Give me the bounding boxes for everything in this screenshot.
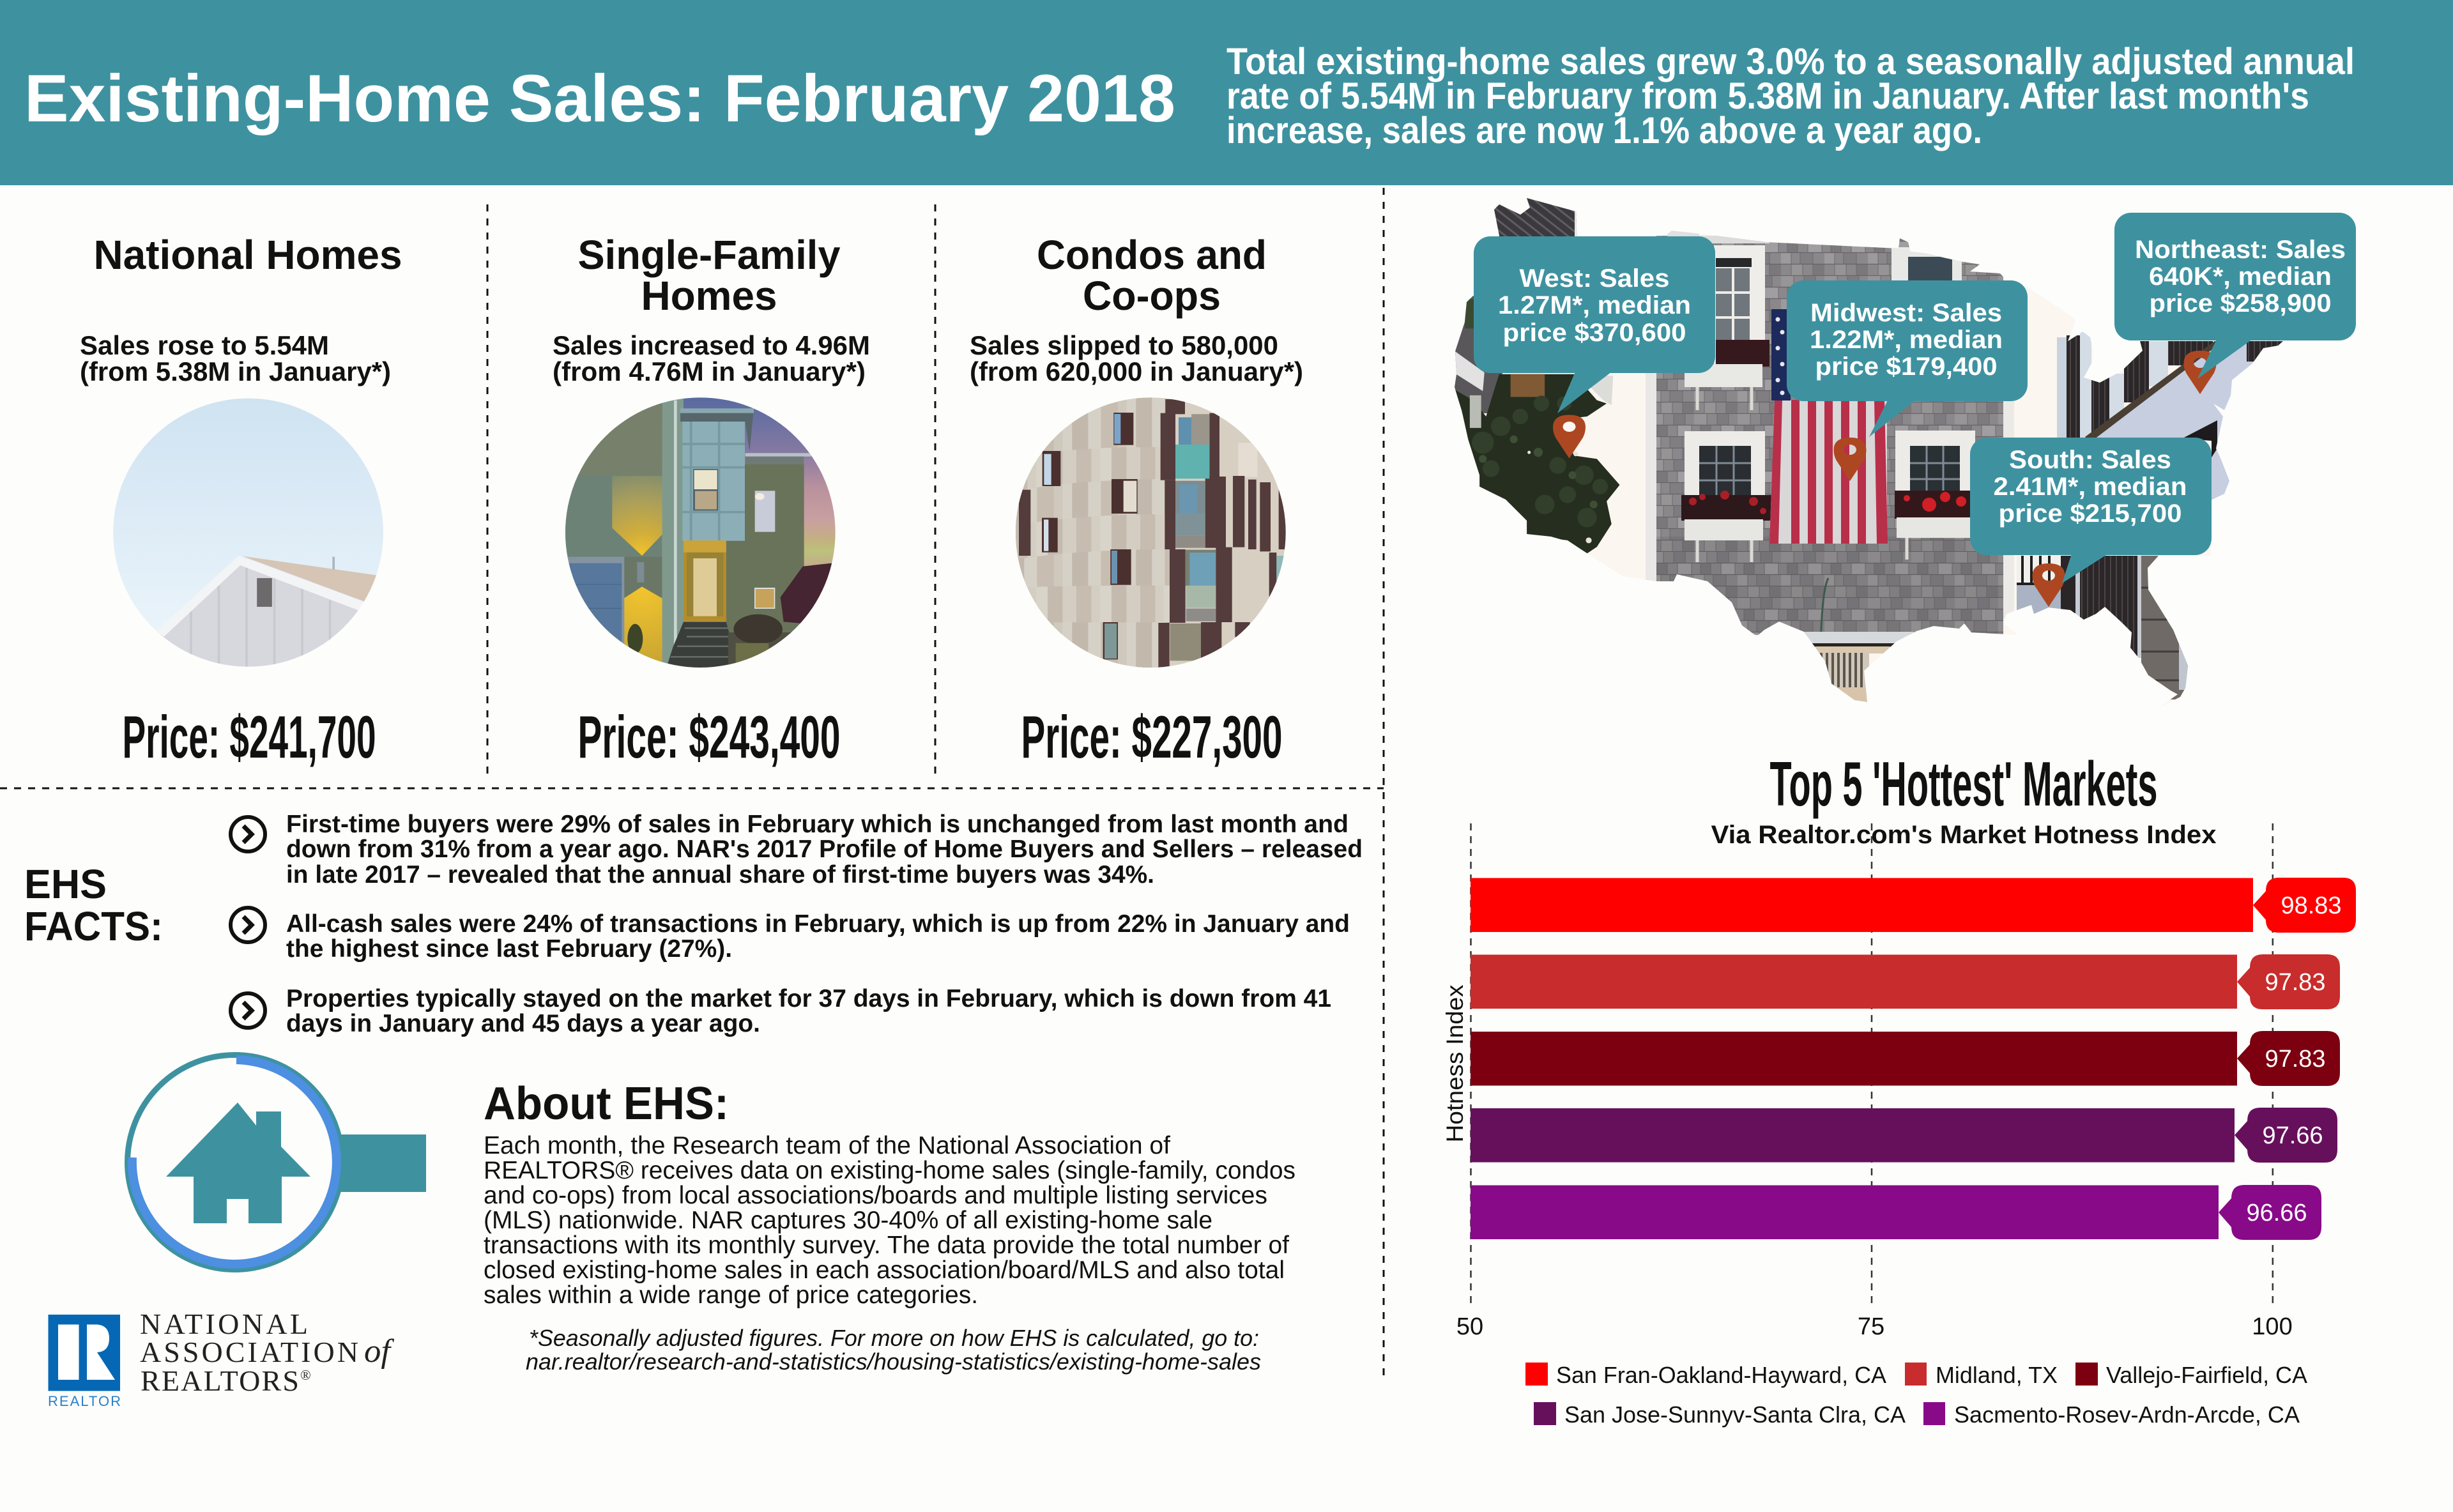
chart title: Top 5 'Hottest' Markets — [1769, 749, 2158, 819]
about paragraph: transactions with its monthly survey. The data provide the total number of — [484, 1232, 1289, 1259]
photo map of the US — [1450, 192, 2293, 715]
header summary: increase, sales are now 1.1% above a year ago. — [1226, 110, 1982, 151]
heading: national homes: National Homes — [93, 232, 402, 278]
logo: national association of realtors: ASSOCIATION — [140, 1336, 358, 1368]
national sales text: (from 5.38M in January*) — [80, 356, 391, 386]
bar: San Jose — [1471, 1108, 2337, 1163]
legend — [1525, 1362, 2307, 1428]
logo: national association of realtors: NATIONAL — [140, 1308, 308, 1340]
y axis label: Hotness Index — [1442, 984, 1468, 1142]
callout: west: West: Sales — [1519, 264, 1670, 293]
national sales text — [80, 330, 391, 386]
header banner — [0, 0, 2453, 185]
about paragraph: REALTORS® receives data on existing-home sales (single-family, condos — [484, 1157, 1295, 1184]
legend: Midland, TX — [1936, 1362, 2058, 1388]
callout: west: price $370,600 — [1502, 319, 1686, 347]
x axis labels: 50 — [1456, 1313, 1483, 1340]
condo sales text: Sales slipped to 580,000 — [970, 330, 1278, 360]
panel: national homes — [80, 232, 402, 770]
panel: condos and co-ops — [970, 232, 1303, 770]
chart subtitle: Via Realtor.com's Market Hotness Index — [1711, 821, 2217, 849]
bar: San Fran — [1471, 878, 2356, 933]
panel: single-family homes — [553, 232, 870, 770]
pin: northeast — [2183, 351, 2217, 394]
heading: condos and co-ops: Condos and — [1037, 232, 1267, 278]
callout: midwest: Midwest: Sales — [1810, 299, 2002, 327]
photo: townhouse at dusk — [562, 396, 839, 673]
title: Existing-Home Sales: February 2018 — [24, 61, 1175, 136]
callout: south — [1970, 438, 2212, 583]
callout: midwest: 1.22M*, median — [1810, 326, 2003, 354]
bar: Midland — [1471, 954, 2340, 1009]
logo: national association of realtors: of — [364, 1333, 395, 1370]
fact 1: down from 31% from a year ago. NAR's 2017 Profile of Home Buyers and Sellers – released — [286, 836, 1363, 863]
legend: San Fran-Oakland-Hayward, CA — [1556, 1362, 1886, 1388]
bar: San Jose: 97.66 — [2262, 1122, 2323, 1149]
condo sales text: (from 620,000 in January*) — [970, 356, 1303, 386]
fact 2: the highest since last February (27%). — [286, 935, 732, 963]
panel: EHS facts — [24, 811, 1363, 1037]
callout: midwest — [1787, 280, 2028, 437]
heading: single-family homes: Single-Family — [577, 232, 841, 278]
about paragraph: Each month, the Research team of the National Association of — [484, 1132, 1170, 1159]
footnote: nar.realtor/research-and-statistics/housing-statistics/existing-home-sales — [526, 1348, 1261, 1375]
price: national: Price: $241,700 — [123, 703, 376, 770]
condo sales text — [970, 330, 1303, 386]
heading: about EHS: About EHS: — [484, 1078, 729, 1129]
pin: west — [1553, 415, 1586, 459]
callout: south: South: Sales — [2009, 446, 2171, 474]
price: condos: Price: $227,300 — [1021, 703, 1283, 770]
callout: midwest: price $179,400 — [1815, 353, 1997, 381]
x axis labels — [1456, 1313, 2293, 1340]
callout: west — [1474, 236, 1715, 413]
callout: south: 2.41M*, median — [1993, 473, 2187, 501]
heading: condos and co-ops: Co-ops — [1083, 273, 1221, 319]
callout: northeast: Northeast: Sales — [2135, 236, 2346, 264]
callout: west: 1.27M*, median — [1498, 291, 1691, 319]
bar: Vallejo: 97.83 — [2265, 1046, 2326, 1073]
callout: south: price $215,700 — [1998, 500, 2182, 528]
header summary: rate of 5.54M in February from 5.38M in January. After last month's — [1226, 75, 2309, 117]
callout: northeast — [2114, 213, 2356, 379]
legend: San Jose-Sunnyv-Santa Clra, CA — [1564, 1401, 1906, 1428]
about paragraph: and co-ops) from local associations/boards and multiple listing services — [484, 1182, 1267, 1209]
heading: single-family homes: Homes — [641, 273, 777, 319]
heading: EHS facts: EHS — [24, 861, 107, 907]
fact 3: days in January and 45 days a year ago. — [286, 1010, 760, 1037]
about paragraph — [484, 1132, 1295, 1309]
x axis labels: 100 — [2252, 1313, 2293, 1340]
heading: EHS facts — [24, 861, 163, 949]
bar: Sacramento — [1471, 1185, 2321, 1240]
icon: chevron bullet 2 — [231, 908, 265, 942]
x axis labels: 75 — [1858, 1313, 1884, 1340]
heading: condos and co-ops — [1037, 232, 1267, 319]
price: single-family: Price: $243,400 — [577, 703, 841, 770]
logo: national association of realtors — [48, 1308, 395, 1409]
photo: house roof against sky — [112, 398, 390, 669]
fact 1: First-time buyers were 29% of sales in February which is unchanged from last month and — [286, 811, 1349, 838]
fact 2 — [231, 908, 1350, 963]
icon: chevron bullet 1 — [231, 817, 265, 851]
bar: Midland: 97.83 — [2265, 969, 2326, 996]
pin: midwest — [1833, 438, 1867, 481]
callout: northeast: 640K*, median — [2149, 263, 2332, 291]
panel: regional map — [1450, 192, 2356, 715]
photo: apartment facade — [1013, 396, 1289, 673]
single-family sales text: Sales increased to 4.96M — [553, 330, 870, 360]
bar: San Fran: 98.83 — [2281, 892, 2342, 919]
fact 1: in late 2017 – revealed that the annual share of first-time buyers was 34%. — [286, 861, 1154, 889]
heading: single-family homes — [577, 232, 841, 319]
about paragraph: sales within a wide range of price categories. — [484, 1281, 978, 1309]
panel: about EHS — [484, 1078, 1295, 1309]
fact 1 — [231, 811, 1363, 889]
footnote — [526, 1325, 1261, 1375]
chart: top 5 hottest markets — [1442, 749, 2356, 1428]
fact 3: Properties typically stayed on the market for 37 days in February, which is down from 41 — [286, 985, 1331, 1012]
icon: chevron bullet 3 — [231, 993, 265, 1028]
about paragraph: closed existing-home sales in each association/board/MLS and also total — [484, 1256, 1285, 1284]
icon: house badge — [128, 1055, 426, 1270]
single-family sales text — [553, 330, 870, 386]
callout: northeast: price $258,900 — [2149, 289, 2332, 317]
legend: Vallejo-Fairfield, CA — [2106, 1362, 2307, 1388]
national sales text: Sales rose to 5.54M — [80, 330, 329, 360]
bar: Sacramento: 96.66 — [2246, 1200, 2307, 1226]
heading: EHS facts: FACTS: — [24, 903, 163, 949]
fact 3 — [231, 985, 1331, 1037]
logo: national association of realtors: REALTOR — [48, 1393, 121, 1409]
single-family sales text: (from 4.76M in January*) — [553, 356, 866, 386]
header summary: Total existing-home sales grew 3.0% to a seasonally adjusted annual — [1226, 41, 2355, 82]
footnote: *Seasonally adjusted figures. For more on how EHS is calculated, go to: — [529, 1325, 1259, 1351]
legend: Sacmento-Rosev-Ardn-Arcde, CA — [1954, 1401, 2300, 1428]
pin: south — [2033, 563, 2065, 607]
logo: national association of realtors: ® — [300, 1367, 311, 1383]
header summary — [1226, 41, 2355, 151]
about paragraph: (MLS) nationwide. NAR captures 30-40% of all existing-home sale — [484, 1207, 1212, 1234]
logo: national association of realtors: REALTORS — [141, 1364, 299, 1397]
fact 2: All-cash sales were 24% of transactions in February, which is up from 22% in January and — [286, 910, 1350, 938]
bar: Vallejo — [1471, 1031, 2340, 1086]
